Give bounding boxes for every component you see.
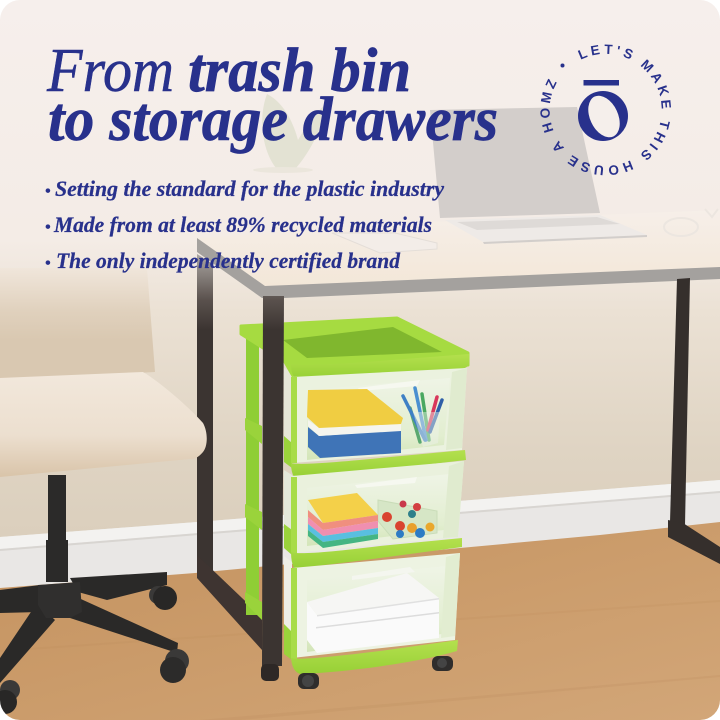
photo: desk lower side rail: [197, 555, 262, 650]
band 2: [291, 450, 466, 477]
cart lid: [241, 318, 469, 378]
cart base band: [291, 640, 458, 674]
photo: wood floor: [0, 522, 720, 720]
chair caster left: [0, 680, 20, 714]
drawer 3 inner: [307, 566, 447, 652]
drawer 3: [292, 553, 460, 658]
photo: desk front leg: [261, 296, 284, 681]
title: From: [46, 37, 174, 105]
photo: office chair: [0, 268, 207, 714]
cart caster front: [298, 673, 319, 689]
chair base: [0, 572, 178, 683]
cart caster rear: [432, 656, 453, 671]
drawer 2 handle: [355, 477, 417, 488]
product: three-drawer cart: [241, 318, 469, 689]
title: trash bin: [188, 37, 411, 105]
drawer 2 sticky notes: [308, 493, 378, 548]
photo: baseboard: [0, 480, 720, 590]
photo: desk right leg: [668, 278, 720, 564]
drawer 1 right pillar: [446, 368, 467, 450]
photo: desk front edge: [197, 238, 720, 298]
chair column: [46, 475, 68, 582]
drawer 1: [292, 368, 467, 463]
drawer 1 inner back: [307, 378, 450, 460]
drawer 1 left rim: [291, 377, 297, 463]
bullet: recycled materials: Made from at least 89% recycled materials: [53, 212, 432, 237]
bullet: recycled materials: •: [45, 219, 51, 236]
chair back: [0, 268, 155, 380]
drawer 2 gem box: [378, 500, 437, 539]
drawer 3 left rim: [291, 568, 297, 660]
drawer 2 left rim: [291, 477, 297, 553]
logo macron bar: [584, 80, 619, 86]
photo: desk top: [197, 210, 720, 286]
chair seat: [0, 372, 207, 477]
bullet: certified brand: The only independently certified brand: [56, 248, 401, 273]
logo badge: [540, 44, 671, 176]
drawer 2 right pillar: [443, 461, 464, 538]
circular slogan: LET'S MAKE THIS HOUSE A HOMZ: [540, 44, 671, 176]
photo: notebook: [332, 233, 437, 253]
photo: faded glasses: [664, 209, 718, 236]
title: [46, 37, 498, 154]
cart side panels: [284, 368, 292, 660]
drawer 1 pen cup: [403, 388, 442, 447]
drawer 3 handle: [352, 567, 415, 580]
chair caster front: [160, 649, 189, 683]
drawer 1 handle: [358, 380, 420, 391]
logo letter o: [578, 91, 628, 142]
photo: faded plant: [253, 94, 333, 173]
bullet: plastic industry: •: [45, 183, 51, 200]
bullet: plastic industry: Setting the standard for the plastic industry: [55, 176, 444, 201]
drawer 1 blue foam: [308, 427, 401, 458]
drawer 3 paper stack: [307, 573, 439, 653]
drawer 1 yellow folder: [307, 389, 403, 428]
photo: desk far left leg: [197, 254, 213, 575]
photo: laptop: [430, 107, 647, 244]
chair caster rear: [149, 586, 177, 610]
title: to storage drawers: [48, 86, 498, 154]
drawer 2: [292, 461, 464, 553]
drawer 2 inner back: [307, 474, 450, 546]
slogan dot: [560, 64, 564, 68]
bullet: certified brand: •: [45, 255, 51, 272]
cart left frame: [245, 335, 262, 620]
band 3: [291, 538, 462, 568]
drawer 3 right pillar: [441, 553, 460, 638]
drawer 1 white sheets: [308, 420, 401, 436]
